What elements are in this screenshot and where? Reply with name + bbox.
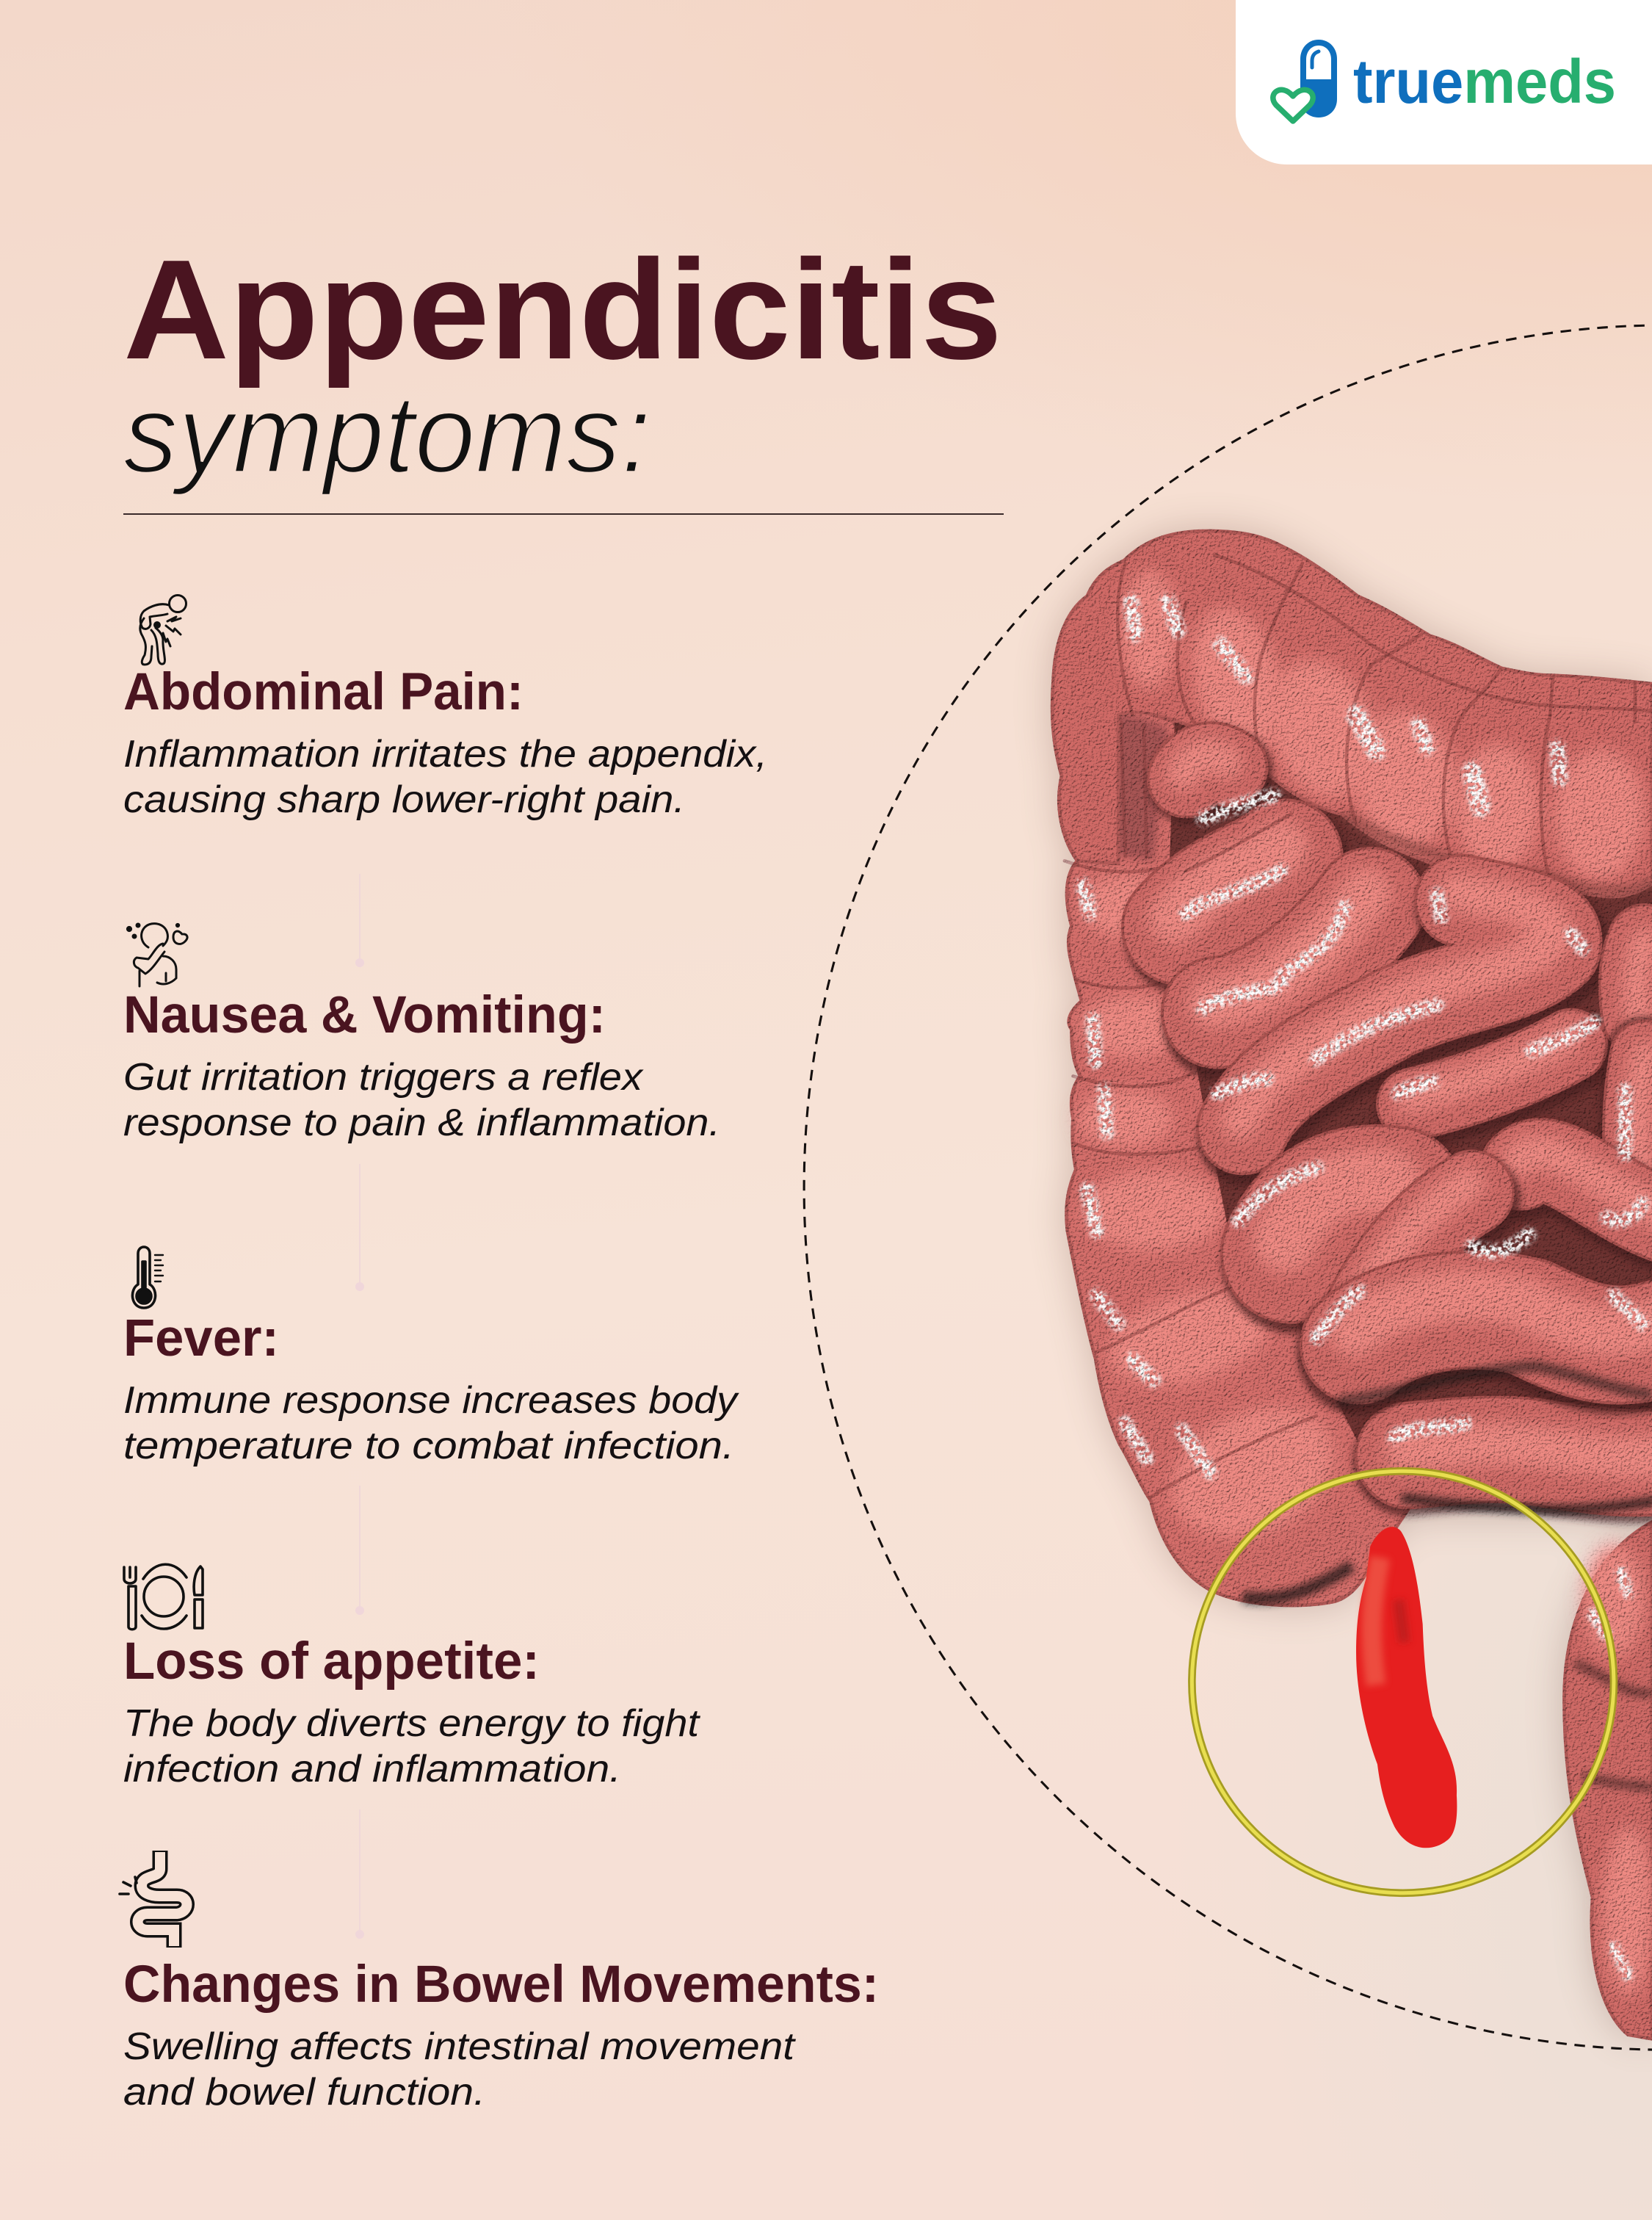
small intestine loop 3 [1213,894,1374,1021]
description [123,1379,739,1467]
description: Gut irritation triggers a reflex [123,1056,644,1099]
icon: heart [1273,90,1313,121]
description: Inflammation irritates the appendix, [123,733,767,775]
description: response to pain & inflammation. [123,1102,720,1144]
logo wordmark: truemeds [1353,47,1616,116]
small intestine long loop [1240,892,1560,1137]
heading: Abdominal Pain: [123,663,524,721]
dashed circle [804,325,1652,2050]
small intestine right edge loops [1637,941,1645,1218]
description: The body diverts energy to fight [123,1702,701,1745]
description: and bowel function. [123,2071,485,2114]
description: causing sharp lower-right pain. [123,778,685,821]
small intestine loop 5 [1410,1038,1574,1111]
small intestine loop 2 [1175,814,1291,934]
lower-right colon [1564,1522,1652,2039]
specular highlights [1083,601,1642,1975]
description [123,733,767,821]
small intestine diagonal loop [1362,1184,1477,1317]
small intestine loop 8 [1286,1181,1399,1260]
yellow highlight ring [1192,1471,1614,1893]
small intestine large loop [1338,1295,1652,1402]
icon: thermometer [132,1247,163,1308]
heading: Changes in Bowel Movements: [123,1956,879,2014]
faint connector lines [355,874,364,1939]
small intestine loop 1 [1184,756,1231,783]
description: Immune response increases body [123,1379,739,1422]
symptom: nausea [123,924,720,1144]
description [123,1056,720,1144]
symptom: fever [123,1247,739,1467]
icon: pill [1300,40,1337,117]
icon: nauseous person [127,924,187,986]
icon: intestine [120,1851,186,1948]
description [123,2025,797,2114]
symptom: loss of appetite [123,1564,701,1790]
transverse colon [1052,531,1652,897]
logo panel [1236,0,1652,164]
small intestine lower loop [1402,1444,1652,1510]
description: infection and inflammation. [123,1748,621,1790]
subtitle: symptoms: [123,372,651,496]
description [123,1702,701,1790]
title: Appendicitis [123,230,1002,388]
heading: Fever: [123,1309,279,1367]
heading: Nausea & Vomiting: [123,986,606,1044]
appendix [1356,1527,1457,1848]
description: Swelling affects intestinal movement [123,2025,797,2068]
symptom: abdominal pain [123,595,767,821]
symptom: changes in bowel movements [120,1851,879,2114]
description: temperature to combat infection. [123,1425,734,1467]
intestine illustration [804,325,1652,2050]
icon: person in pain [140,595,186,665]
shadow beneath intestines [1052,531,1652,2039]
icon: plate and cutlery [124,1564,203,1630]
intestine body [1052,531,1652,2039]
heading: Loss of appetite: [123,1633,540,1691]
interior crevice fill [1168,715,1652,1486]
ascending colon [1052,682,1410,1605]
small intestine loop 7 [1519,1151,1652,1228]
